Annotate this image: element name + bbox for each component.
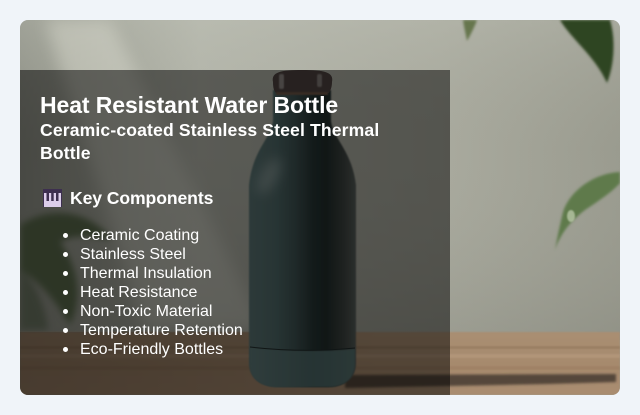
table — [20, 332, 620, 395]
item: Non-Toxic Material — [80, 303, 212, 320]
heading text: Key Components — [70, 188, 213, 208]
subtitle — [40, 120, 379, 163]
blurred plant at left — [20, 213, 112, 330]
item: Ceramic Coating — [80, 227, 199, 244]
icon: piano keys — [43, 189, 62, 207]
item: Temperature Retention — [80, 322, 243, 339]
leaf: top small — [463, 20, 477, 41]
light beam on wall — [45, 20, 265, 330]
list: components — [63, 227, 243, 358]
overlay panel — [20, 70, 450, 395]
item: Stainless Steel — [80, 246, 186, 263]
item: Eco-Friendly Bottles — [80, 341, 223, 358]
table shadow of bottle — [345, 374, 616, 388]
item: Heat Resistance — [80, 284, 197, 301]
subtitle: Ceramic-coated Stainless Steel Thermal — [40, 120, 379, 140]
subtitle: Bottle — [40, 143, 91, 163]
title: Heat Resistant Water Bottle — [40, 92, 338, 118]
bottle — [249, 70, 356, 387]
leaf: top right — [560, 20, 614, 83]
leaf: right — [555, 172, 620, 250]
item: Thermal Insulation — [80, 265, 212, 282]
leaf highlight — [567, 210, 575, 222]
heading: key components — [43, 188, 213, 208]
